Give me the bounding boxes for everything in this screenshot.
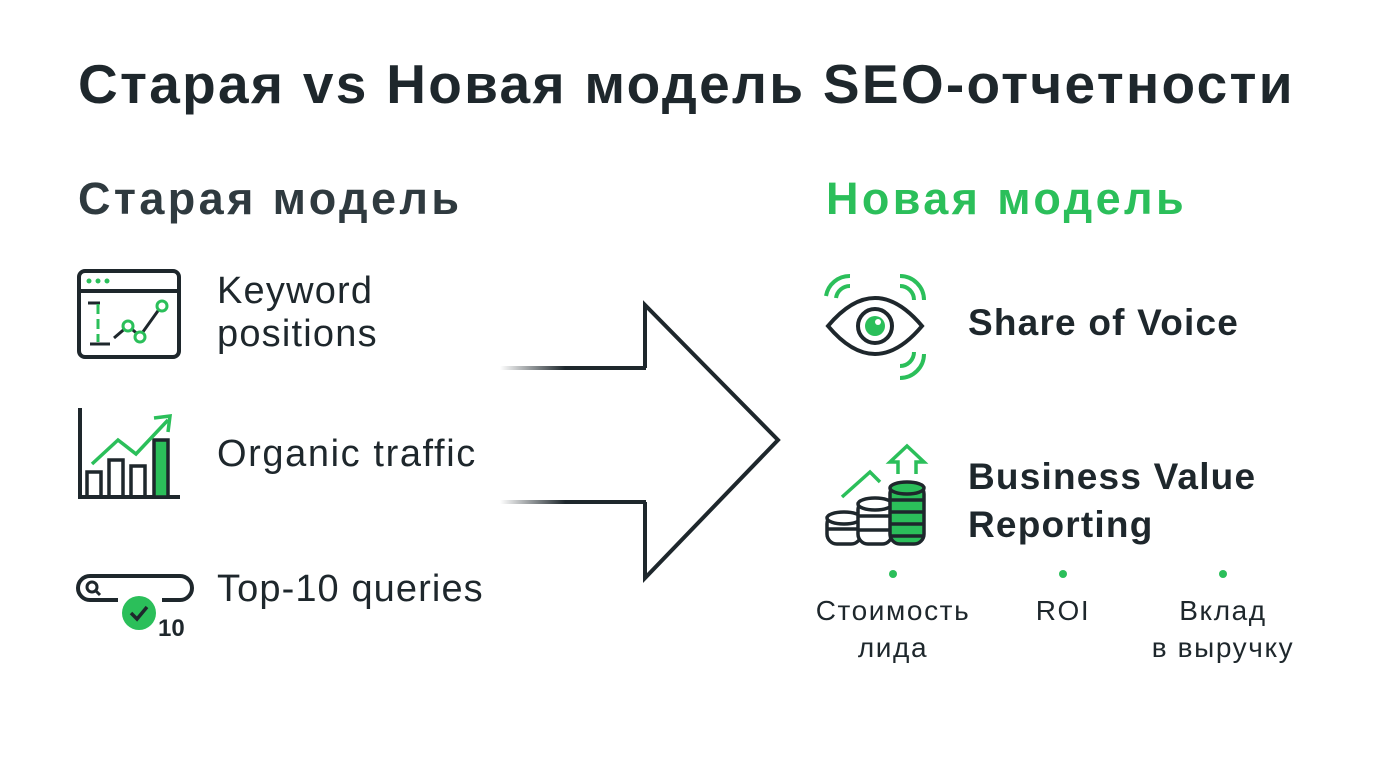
metric: ROI [1036,570,1090,626]
text: share of voice: Share of Voice [968,302,1239,343]
text: business value reporting [968,456,1256,545]
heading: old model: Старая модель [78,173,462,224]
text: keyword positions: Keyword [217,270,373,312]
arrow [502,300,781,583]
heading: new model: Новая модель [826,173,1187,224]
icon: coins growth [825,444,928,546]
icon: keyword positions [77,269,181,359]
icon: top-10 search [76,574,194,642]
title: Старая vs Новая модель SEO-отчетности [78,53,1295,115]
icon: top-10 search: 10 [158,615,185,642]
metric: ROI: ROI [1036,595,1090,626]
text: keyword positions: positions [217,313,378,355]
text: keyword positions [217,270,378,355]
text: top-10 queries: Top-10 queries [217,568,484,610]
icon: eye [824,274,926,380]
metric: lead cost: Стоимость [816,595,970,626]
metric: revenue contribution: Вклад [1179,595,1267,626]
metric: lead cost [816,570,970,663]
metric: lead cost: лида [858,632,928,663]
metric: revenue contribution: в выручку [1152,632,1294,663]
metric: revenue contribution [1152,570,1294,663]
text: business value reporting: Reporting [968,504,1154,545]
text: business value reporting: Business Value [968,456,1256,497]
icon: organic traffic chart [78,408,180,499]
text: organic traffic: Organic traffic [217,433,477,475]
